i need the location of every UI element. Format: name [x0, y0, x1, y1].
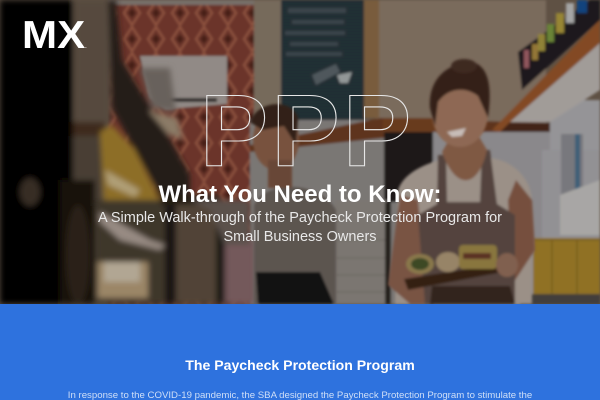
sandwich tray	[404, 264, 503, 290]
woman figure	[388, 59, 535, 304]
lower wall and wood ledge	[250, 120, 430, 304]
logo: MX: MX.	[22, 14, 87, 57]
wallpaper wall	[108, 4, 256, 304]
chalkboard	[281, 0, 365, 121]
subtitle: A Simple Walk-through of the Paycheck Protection Program for	[98, 210, 502, 226]
photo darkening overlay	[0, 0, 600, 304]
subtitle	[98, 210, 502, 245]
panel: blue intro section	[0, 304, 600, 400]
man figure	[250, 104, 336, 304]
white brick area	[335, 200, 387, 304]
board frame	[364, 0, 379, 118]
back wall	[254, 0, 282, 130]
right walls	[433, 132, 600, 304]
left foreground: dark column and display case	[0, 0, 255, 305]
wood shelf	[492, 20, 600, 132]
hero photo: cafe workers	[0, 0, 600, 304]
subtitle: Small Business Owners	[223, 229, 377, 245]
section heading: The Paycheck Protection Program	[185, 357, 415, 373]
title: What You Need to Know:	[158, 181, 442, 208]
dark doorway	[384, 132, 434, 202]
yellow folders	[533, 238, 600, 294]
shelf boxes	[518, 0, 600, 90]
air conditioner	[140, 56, 227, 109]
